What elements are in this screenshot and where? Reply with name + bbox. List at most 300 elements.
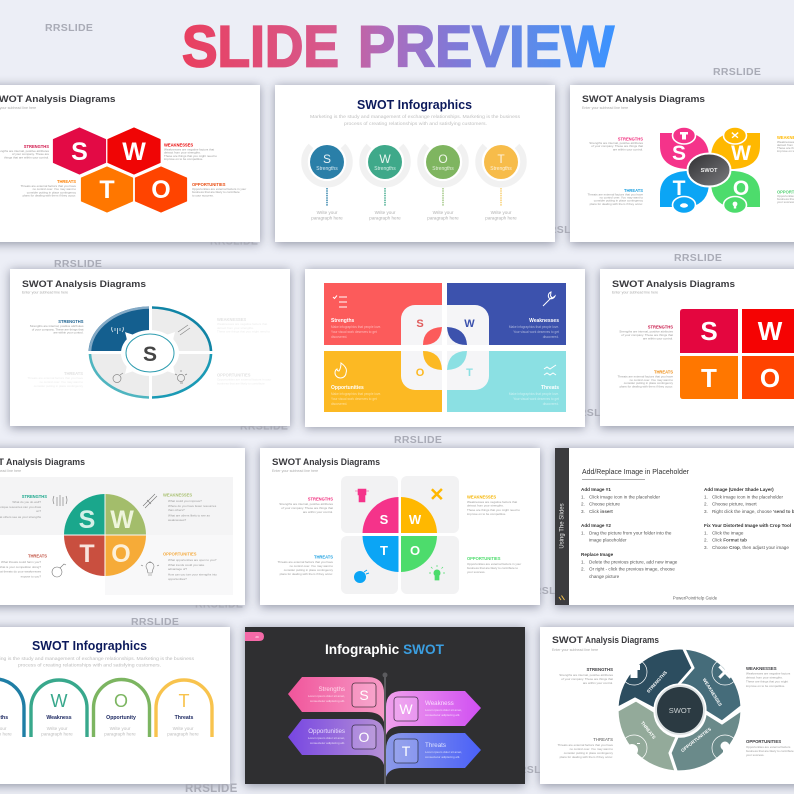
watermarks: RRSLIDE: [541, 224, 589, 236]
panel: square SWOT: [600, 269, 794, 426]
arrow: strengths: [288, 677, 384, 722]
arch O: [94, 679, 150, 737]
petal letters: O: [733, 177, 749, 200]
panel: help guide: [555, 448, 794, 605]
labels: business that are likely to contribute: [192, 190, 240, 194]
arrow: strengths: consectetur adipiscing elit.: [310, 699, 345, 703]
labels: STRENGTHS: [24, 144, 49, 149]
square letters: O: [760, 363, 780, 393]
labels: Threats are external factors that you have: [27, 376, 83, 380]
labels: Weaknesses are negative factors that: [217, 322, 267, 326]
heading: [22, 279, 146, 290]
labels: Strengths are internal, positive attributes: [279, 502, 333, 506]
labels: are within your control.: [643, 336, 673, 340]
panel: quarter circle SWOT: [260, 448, 540, 605]
labels: [0, 142, 246, 198]
labels: plans for dealing with them if they occur.: [280, 572, 333, 576]
left column: Click image icon in the placeholder: [589, 494, 660, 500]
heading: SWOT: [552, 635, 583, 646]
tile text: Strengths: [331, 318, 355, 324]
icon circles: [672, 127, 746, 214]
labels: These are things that you might need to: [217, 330, 270, 334]
circle S: S: [323, 152, 331, 166]
labels: What trends could you take: [168, 563, 205, 567]
arrow: opportunities: consectetur adipiscing elit.: [310, 741, 345, 745]
panel: pie SWOT: [0, 448, 245, 605]
left column: Delete the previous picture, add new image: [589, 560, 678, 564]
labels: your success.: [746, 753, 765, 757]
labels: plans for dealing with them if they occur.: [23, 194, 76, 198]
labels: THREATS: [593, 737, 613, 742]
left column: [581, 487, 678, 579]
labels: consider putting in place contingency: [34, 384, 83, 388]
heading: Analysis Diagrams: [646, 279, 735, 290]
quarter circles: W: [409, 512, 422, 527]
labels: What are others likely to see as: [168, 514, 210, 518]
labels: of your company. These are things that: [591, 144, 643, 148]
arch T: [156, 680, 212, 737]
quarter circles: [362, 497, 437, 572]
circle S: Strengths: [316, 166, 338, 172]
tile text: Make infographics that people love.: [509, 325, 559, 329]
square letters: T: [701, 363, 717, 393]
circle T: Strengths: [490, 166, 512, 172]
labels: Opportunities are external factors: [746, 745, 791, 749]
labels: no control over. You may want to: [290, 564, 333, 568]
tile icons: [333, 292, 556, 378]
circle S: [304, 145, 350, 220]
labels: plans for dealing with them if they occur.: [590, 202, 643, 206]
tile text: Your visual work deserves to get: [513, 330, 559, 334]
arch O: Write your: [110, 726, 131, 731]
panel: cycle wheel: [540, 627, 794, 784]
main title: SLIDE: [182, 14, 339, 80]
labels: STRENGTHS: [618, 136, 643, 142]
arch W: Weakness: [46, 715, 72, 721]
watermarks: RRSLIDE: [511, 764, 559, 776]
right column: Choose picture, insert: [712, 502, 757, 506]
hexagons: [54, 128, 186, 212]
centre circle: [655, 685, 705, 735]
tile text: discovered.: [543, 335, 559, 339]
labels: STRENGTHS: [22, 494, 47, 499]
arch W: paragraph here: [41, 732, 73, 736]
labels: [277, 494, 521, 576]
guide heading: [582, 469, 690, 480]
labels: [0, 492, 217, 581]
wheel segment: threats: [618, 701, 676, 771]
watermarks: RRSLIDE: [571, 407, 619, 419]
arrow: weakness: consectetur adipiscing elit.: [425, 713, 460, 717]
arrow: weakness: W: [399, 701, 413, 717]
labels: Threats are external factors that you have: [587, 192, 643, 196]
labels: THREATS: [314, 554, 333, 560]
stem: [382, 672, 388, 784]
pie chart: O: [111, 540, 131, 568]
hexagon letters: O: [151, 176, 171, 204]
circle W: Strengths: [374, 166, 396, 172]
right column: 2.: [704, 538, 708, 542]
left column: Replace Image: [581, 552, 614, 557]
right column: Choose Crop, then adjust your image: [712, 545, 789, 550]
tile text: Your visual work deserves to get: [331, 397, 377, 401]
right column: Click Format tab: [712, 538, 747, 542]
left column: Choose picture: [589, 502, 620, 506]
circle O: [420, 145, 465, 220]
labels: STRENGTHS: [58, 319, 84, 324]
circle S: Write your: [317, 210, 338, 215]
ring icons: [112, 325, 190, 383]
heading: Analysis Diagrams: [25, 94, 116, 105]
labels: Weaknesses are negative factors that: [164, 148, 214, 152]
arch T: T: [178, 691, 190, 711]
labels: detract from your strengths.: [164, 150, 201, 154]
left column: Add Image #2: [581, 523, 611, 528]
description: [310, 114, 521, 127]
arrow: strengths: Strengths: [319, 686, 345, 693]
hexagon letters: W: [122, 138, 146, 166]
tile text: Your visual work deserves to get: [513, 397, 559, 401]
watermarks: RRSLIDE: [54, 258, 102, 270]
petal letters: W: [731, 142, 751, 165]
arrow: threats: Threats: [425, 742, 446, 749]
subheading: Enter your subhead line here: [552, 648, 598, 652]
heading: [582, 94, 705, 105]
hexagon letters: S: [71, 138, 88, 166]
line icons: [52, 494, 159, 577]
panel: circle infographic: [275, 85, 555, 242]
heading: [552, 635, 659, 646]
labels: Strengths are internal, positive attributes: [30, 324, 84, 328]
labels: Strengths are internal, positive attributes: [589, 141, 643, 145]
watermarks: RRSLIDE: [526, 585, 574, 597]
labels: than others?: [168, 508, 185, 512]
subheading: Enter your subhead line here: [22, 290, 68, 294]
quarter circles: S: [380, 512, 389, 527]
guide heading: Add/Replace Image in Placeholder: [582, 469, 690, 476]
labels: What do you do well?: [12, 500, 41, 504]
labels: What threats could harm you?: [1, 560, 41, 564]
labels: of your company. These are: [12, 152, 49, 156]
labels: things that are within your control.: [4, 156, 49, 160]
labels: are within your control.: [613, 148, 643, 152]
petals: [660, 133, 760, 207]
labels: consider putting in place contingency: [284, 568, 333, 572]
arrow: weakness: Lorem ipsum dolor sit amet,: [425, 708, 462, 712]
tile text: discovered.: [331, 335, 347, 339]
labels: detract from your strengths.: [467, 504, 504, 508]
labels: to your success.: [192, 194, 214, 198]
labels: STRENGTHS: [648, 324, 673, 330]
right column: [704, 487, 794, 550]
icons: [354, 484, 447, 583]
right column: 3.: [704, 509, 708, 514]
labels: consider putting in place contingency: [624, 381, 673, 385]
labels: These are things that you might need to: [467, 508, 520, 512]
cross gaps: [396, 300, 494, 395]
arch O: O: [114, 691, 128, 711]
centre letters: [416, 318, 475, 379]
heading: SWOT: [22, 279, 53, 290]
labels: consider putting in place contingency: [27, 190, 76, 194]
tile text: Weaknesses: [529, 318, 559, 324]
centre letters: T: [466, 367, 473, 379]
grey tiles: [341, 476, 459, 594]
circle O: Strengths: [432, 166, 454, 172]
square letters: S: [700, 316, 718, 346]
arrow: weakness: Weakness: [425, 700, 454, 707]
rotated labels: [640, 670, 723, 753]
main title: PREVIEW: [358, 14, 614, 80]
labels: no control over. You may want to: [600, 196, 643, 200]
background tints: [0, 477, 233, 595]
labels: [587, 135, 794, 206]
heading: Analysis Diagrams: [6, 457, 85, 468]
heading: SWOT Infographics: [32, 639, 147, 653]
arch O: Opportunity: [106, 715, 136, 721]
arrow: opportunities: O: [359, 729, 370, 745]
icons: [626, 661, 736, 756]
labels: OPPORTUNITIES: [746, 739, 781, 744]
labels: no control over. You may want to: [570, 747, 613, 751]
labels: What could you improve?: [168, 499, 202, 503]
tile text: Make infographics that people love.: [331, 325, 381, 329]
right column: 2.: [704, 502, 708, 506]
small icons: [680, 132, 739, 208]
labels: no control over. You may want to: [33, 187, 76, 191]
labels: STRENGTHS: [308, 496, 333, 502]
labels: THREATS: [64, 371, 83, 376]
arch W: W: [50, 691, 68, 711]
quarter circles: O: [410, 543, 420, 558]
labels: Where do you have fewer resources: [168, 504, 217, 508]
labels: of your company. These are things that: [621, 333, 673, 337]
labels: WEAKNESSES: [163, 492, 192, 498]
labels: WEAKNESSES: [217, 317, 246, 322]
circle W: [363, 145, 408, 220]
arrow: threats: [386, 733, 481, 777]
left column: 2.: [581, 502, 585, 506]
rotated labels: WEAKNESSES: [702, 677, 723, 707]
footer note: PowerPointHelp Guide: [673, 596, 718, 600]
right column: Fix Your Distorted Image with Crop Tool: [704, 523, 791, 528]
labels: Weaknesses are negative factors: [746, 672, 791, 676]
arrow: strengths: Lorem ipsum dolor sit amet,: [308, 694, 345, 698]
squares: [680, 309, 794, 399]
labels: consider putting in place contingency: [564, 751, 613, 755]
labels: OPPORTUNITIES: [192, 182, 226, 187]
labels: Opportunities are external factors in your: [192, 187, 246, 191]
arch T: Write your: [173, 726, 194, 731]
left column: 1.: [581, 560, 585, 564]
labels: OPPORTUNITIES: [163, 552, 197, 556]
labels: These are things that you might: [746, 680, 788, 684]
arrow: threats: T: [402, 743, 411, 759]
labels: Threats are external factors that you have: [617, 374, 673, 378]
centre circle: SWOT: [669, 706, 692, 715]
labels: business that are likely to contribute: [746, 749, 794, 753]
labels: improve on to be competitive.: [164, 157, 203, 161]
watermarks: RRSLIDE: [674, 252, 722, 264]
right column: 1.: [704, 530, 708, 536]
labels: detract from your strengths.: [217, 326, 254, 330]
circle T: T: [497, 152, 505, 166]
subheading: Enter your subhead line here: [272, 469, 318, 473]
tile text: Threats: [541, 385, 559, 391]
arrow: opportunities: Lorem ipsum dolor sit amet,: [308, 736, 345, 740]
panel: petal SWOT: [570, 85, 794, 242]
labels: OPPORTUNITIES: [467, 556, 501, 561]
circle O: paragraph here: [427, 216, 459, 220]
hexagon letters: [71, 138, 171, 204]
subheading: Enter your subhead line here: [612, 290, 658, 294]
wheel segment: opportunities: [671, 711, 741, 771]
labels: Strengths are internal, positive attributes: [619, 330, 673, 334]
labels: improve on to be competitive.: [467, 512, 506, 516]
heading: SWOT: [582, 94, 613, 105]
labels: of your company. These are things that: [281, 506, 333, 510]
watermarks: RRSLIDE: [394, 434, 442, 446]
circle S: paragraph here: [311, 216, 343, 220]
watermarks: RRSLIDE: [131, 616, 179, 628]
panel: colour tiles: [305, 269, 585, 427]
heading: SWOT Infographics: [357, 98, 472, 112]
arrow: opportunities: Opportunities: [308, 728, 345, 735]
main title: [182, 14, 614, 80]
pie chart: S: [79, 506, 95, 534]
left column: change picture: [589, 574, 620, 579]
circle W: Write your: [375, 210, 396, 215]
description: process of creating relationships with and satisfying customers.: [18, 662, 161, 668]
circle T: [478, 145, 524, 220]
rotated labels: THREATS: [640, 720, 657, 740]
left column: 1.: [581, 530, 585, 536]
rotated labels: OPPORTUNITIES: [680, 727, 712, 753]
circle O: O: [438, 152, 448, 166]
labels: Opportunities are external factors in your: [467, 562, 521, 566]
heading: SWOT: [612, 279, 644, 290]
tile text: [331, 318, 559, 406]
petal letters: [672, 142, 751, 200]
watermarks: RRSLIDE: [210, 236, 258, 248]
centre letters: O: [416, 367, 425, 379]
arch T: paragraph here: [167, 732, 199, 736]
labels: Strengths are internal, positive attributes: [559, 673, 613, 677]
centre badge: S: [143, 343, 157, 366]
panel: arch infographic: [0, 627, 230, 784]
heading: Analysis Diagrams: [585, 635, 659, 646]
right column: Click the image: [712, 530, 744, 536]
wheel segment: strengths: [618, 649, 692, 708]
square letters: W: [758, 316, 783, 346]
tile text: Your visual work deserves to get: [331, 330, 377, 334]
labels: business that are likely to contribute: [217, 382, 265, 386]
arch O: paragraph here: [104, 732, 136, 736]
description: Marketing is the study and management of exchange relationships. Marketing is the business: [310, 114, 521, 120]
labels: business that are likely to contribute to: [467, 566, 518, 570]
labels: no control over. You may want to: [630, 378, 673, 382]
labels: plans for dealing with them if they occur.: [620, 384, 673, 388]
left column: 1.: [581, 494, 585, 500]
arrow: weakness: [386, 691, 481, 735]
labels: are within your control.: [303, 510, 333, 514]
right column: 3.: [704, 545, 708, 550]
tile text: Make infographics that people love.: [509, 392, 559, 396]
description: [0, 656, 195, 668]
watermarks: RRSLIDE: [45, 22, 93, 34]
pie chart: [64, 494, 146, 576]
panel: dark infographic: [245, 627, 525, 784]
centre letters: S: [416, 318, 424, 330]
page tab: 29: [255, 635, 259, 639]
heading: [612, 279, 735, 290]
centre badge: SWOT: [701, 168, 718, 174]
arrow: strengths: S: [359, 687, 369, 703]
right column: 1.: [704, 494, 708, 500]
right column: Click image icon in the placeholder: [712, 494, 783, 500]
square letters: [700, 316, 783, 393]
arch S: [0, 679, 24, 737]
sidebar: Using The Slides: [560, 503, 566, 549]
petals: [423, 327, 467, 370]
watermarks: RRSLIDE: [240, 420, 288, 432]
tile text: discovered.: [543, 402, 559, 406]
sidebar: [555, 448, 569, 605]
labels: expose to you?: [21, 574, 41, 578]
labels: WEAKNESSES: [164, 142, 193, 148]
labels: are within your control.: [53, 330, 84, 334]
labels: These are things that you might need to: [164, 154, 217, 158]
arch W: [31, 680, 87, 737]
tiles: [324, 283, 566, 412]
heading: Analysis Diagrams: [303, 457, 380, 468]
labels: weaknesses?: [168, 518, 187, 522]
labels: opportunities?: [168, 577, 187, 581]
left column: Drag the picture from your folder into the: [589, 530, 672, 536]
labels: WEAKNESSES: [467, 494, 496, 500]
subheading: Enter your subhead line here: [582, 106, 628, 110]
circle T: Write your: [491, 210, 512, 215]
right column: Add Image (Under Shade Layer): [704, 487, 774, 492]
petal letters: S: [672, 142, 686, 165]
labels: of your company. These are things that: [561, 677, 613, 681]
heading: Analysis Diagrams: [55, 279, 146, 290]
heading: Infographic SWOT: [325, 641, 444, 657]
circle W: paragraph here: [369, 216, 401, 220]
rotated labels: STRENGTHS: [646, 670, 668, 694]
centre letters: W: [464, 318, 475, 330]
labels: no control over. You may want to: [40, 380, 83, 384]
left column: Or right - click the previous image, choose: [589, 566, 675, 572]
heading: Analysis Diagrams: [615, 94, 705, 105]
labels: Threats are external factors that you have: [20, 184, 76, 188]
labels: WEAKNESSES: [746, 666, 777, 671]
tile text: Opportunities: [331, 385, 364, 391]
centre badge: [688, 154, 730, 186]
labels: What opportunities are open to you?: [168, 558, 217, 562]
page tab: [245, 632, 264, 641]
arrow: threats: Lorem ipsum dolor sit amet,: [425, 750, 462, 754]
labels: Weaknesses are negative factors that: [467, 500, 517, 504]
labels: plans for dealing with them if they occur.: [560, 755, 613, 759]
labels: [617, 324, 673, 388]
centre badge: [121, 330, 179, 376]
circle W: W: [379, 152, 391, 166]
labels: THREATS: [28, 554, 47, 558]
panel: ring SWOT: [10, 269, 290, 426]
petal letters: T: [673, 177, 686, 200]
quarter circles: T: [380, 543, 388, 558]
